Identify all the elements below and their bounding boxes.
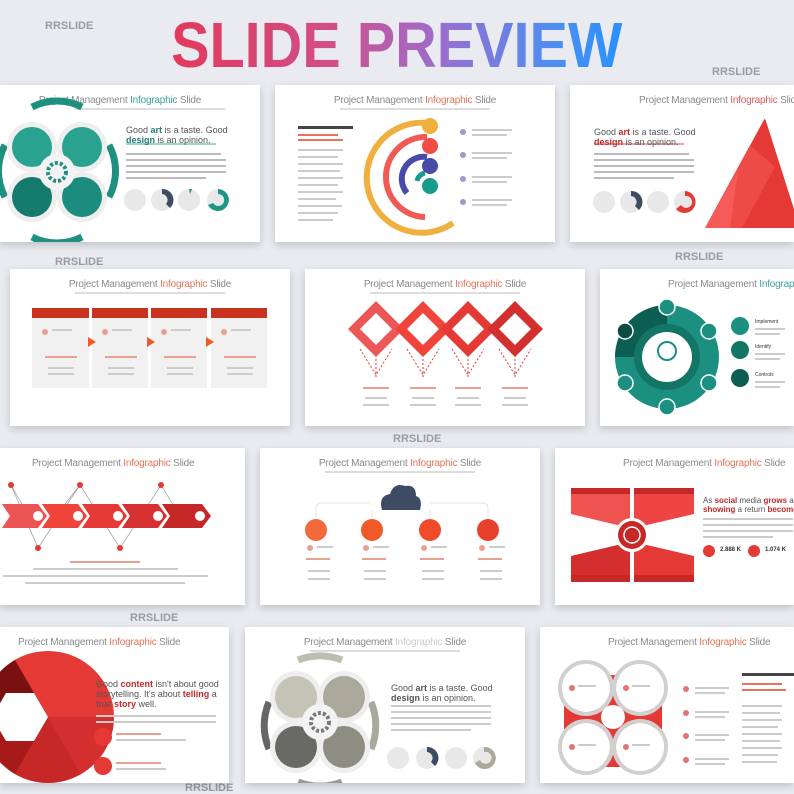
slide 6: teal ring	[600, 269, 794, 426]
slide 2: concentric arcs	[275, 85, 555, 242]
slide 9: red quadrant: 1.074 K	[765, 547, 786, 553]
slide 7: chevrons	[0, 448, 245, 605]
watermark: RRSLIDE	[675, 251, 723, 263]
slide 11: gray flower: Project Management Infographic Slide	[304, 637, 466, 648]
slide 1: teal flower: Project Management Infographic Slide	[39, 95, 201, 106]
slide 3: red pyramid: Good art is a taste. Good design is an opinion.	[594, 127, 696, 147]
slide 5: red diamonds	[305, 269, 585, 426]
slide 10: red hexagon circle: Good content isn't about good storytelling. It's about telling a true story well.	[96, 679, 219, 709]
slide 1: teal flower	[0, 85, 260, 242]
slide 12: rings with red cross: Project Management Infographic Slide	[608, 637, 770, 648]
slide 8: cloud: Project Management Infographic Slide	[319, 458, 481, 469]
slide 6: teal ring: Identify	[755, 344, 771, 350]
slide 8: cloud	[260, 448, 540, 605]
slide 1: teal flower: Good art is a taste. Good design is an opinion.	[126, 125, 228, 145]
slide 5: red diamonds: Project Management Infographic Slide	[364, 279, 526, 290]
watermark: RRSLIDE	[130, 612, 178, 624]
slide 11: gray flower	[245, 627, 525, 783]
slide 2: concentric arcs: Project Management Infographic Slide	[334, 95, 496, 106]
slide 4: four columns	[10, 269, 290, 426]
slide 12: rings with red cross	[540, 627, 794, 783]
watermark: RRSLIDE	[45, 20, 93, 32]
slide 6: teal ring: Controls	[755, 372, 774, 378]
slide 11: gray flower: Good art is a taste. Good design is an opinion.	[391, 683, 493, 703]
slide 3: red pyramid	[570, 85, 794, 242]
slide 10: red hexagon circle	[0, 627, 229, 783]
slide 9: red quadrant: 2.888 K	[720, 547, 741, 553]
slide 7: chevrons: Project Management Infographic Slide	[32, 458, 194, 469]
watermark: RRSLIDE	[393, 433, 441, 445]
watermark: RRSLIDE	[55, 256, 103, 268]
slide 10: red hexagon circle: Project Management Infographic Slide	[18, 637, 180, 648]
watermark: RRSLIDE	[712, 66, 760, 78]
watermark: RRSLIDE	[185, 782, 233, 794]
slide 9: red quadrant: Project Management Infographic Slide	[623, 458, 785, 469]
title: SLIDE PREVIEW	[171, 9, 623, 81]
slide 4: four columns: Project Management Infographic Slide	[69, 279, 231, 290]
slide 6: teal ring: Implement	[755, 319, 778, 325]
slide 9: red quadrant	[555, 448, 794, 605]
